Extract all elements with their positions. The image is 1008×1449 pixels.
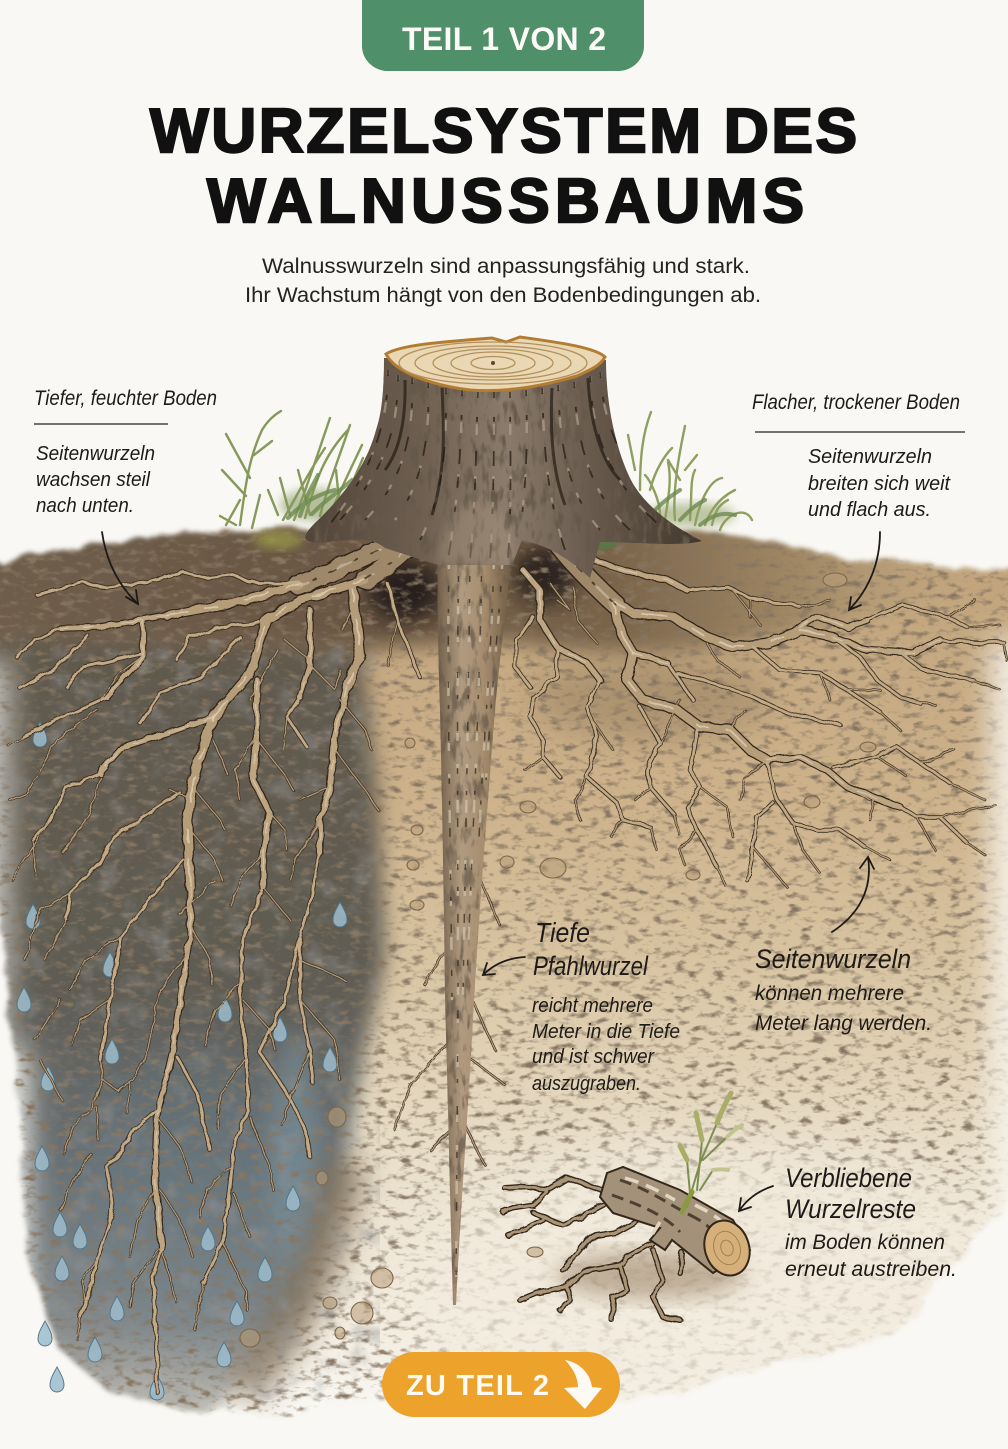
dark gaps beneath stump (367, 558, 443, 622)
soil speckle texture (0, 525, 1008, 1425)
annotation: taproot: Pfahlwurzel (533, 951, 649, 981)
next part button (382, 1352, 620, 1417)
annotation: taproot: auszugraben. (532, 1073, 641, 1095)
title (150, 97, 857, 236)
subtitle: Ihr Wachstum hängt von den Bodenbedingungen ab. (245, 284, 761, 307)
annotation: taproot: reicht mehrere (532, 995, 653, 1017)
annotation: flat dry soil: breiten sich weit (808, 473, 951, 495)
top tab (362, 0, 644, 71)
annotation: deep moist soil: Tiefer, feuchter Boden (34, 387, 217, 410)
small roots (503, 1178, 682, 1320)
moss on soil (254, 531, 302, 549)
lateral roots (8, 500, 1006, 1392)
top tab: TEIL 1 VON 2 (402, 21, 606, 57)
arrow: to right roots (849, 532, 880, 610)
annotation: deep moist soil: nach unten. (36, 495, 134, 517)
stump (290, 337, 720, 580)
arrow: to left roots (102, 532, 138, 604)
log end grain (697, 1215, 757, 1281)
annotation: flat dry soil: und flach aus. (808, 499, 931, 521)
annotation: deep moist soil (34, 387, 217, 517)
sprout (680, 1093, 742, 1212)
taproot collar (438, 500, 514, 565)
annotation: taproot (532, 917, 680, 1095)
topsoil band (0, 520, 1008, 652)
icon: water drops (17, 722, 347, 1400)
taproot (438, 565, 510, 1305)
icon: grass right of stump (591, 412, 752, 549)
annotation: taproot: Tiefe (535, 917, 590, 948)
small plant at stump base (591, 533, 617, 549)
subtitle: Walnusswurzeln sind anpassungsfähig und stark. (262, 255, 750, 278)
remaining root piece with sprout (503, 1093, 757, 1320)
annotation: deep moist soil: wachsen steil (36, 469, 151, 491)
annotation: lateral roots: Meter lang werden. (755, 1012, 932, 1035)
annotation: flat dry soil (752, 391, 965, 521)
annotation: remaining roots (785, 1163, 957, 1281)
blue water wash (108, 1058, 262, 1342)
annotation: remaining roots: Verbliebene (785, 1163, 912, 1193)
annotation: lateral roots: können mehrere (755, 982, 904, 1005)
annotation: deep moist soil: Seitenwurzeln (36, 443, 155, 465)
soil cross-section (0, 500, 1008, 1449)
annotation: flat dry soil: Seitenwurzeln (808, 446, 932, 468)
left faded edge (0, 660, 10, 1449)
annotation: taproot: und ist schwer (532, 1046, 655, 1068)
annotation: taproot: Meter in die Tiefe (532, 1021, 680, 1043)
subtitle (245, 255, 761, 307)
annotation: remaining roots: im Boden können (785, 1231, 945, 1254)
cut surface rings (386, 337, 605, 391)
annotation: flat dry soil: Flacher, trockener Boden (752, 391, 960, 414)
title: WURZELSYSTEM DES (150, 97, 857, 166)
wet dark soil, left (0, 620, 385, 1430)
annotation: lateral roots (755, 944, 932, 1035)
arrow: to taproot (483, 957, 525, 975)
arrow: to root piece (739, 1186, 773, 1211)
annotation: lateral roots: Seitenwurzeln (755, 944, 911, 974)
next part button: ZU TEIL 2 (406, 1370, 549, 1402)
icon: down arrow (564, 1360, 602, 1409)
log body (600, 1167, 750, 1273)
brown transition band (240, 1160, 345, 1390)
pale wash over lower right (400, 1150, 1008, 1449)
annotation: remaining roots: erneut austreiben. (785, 1258, 957, 1281)
title: WALNUSSBAUMS (207, 167, 804, 236)
arrow: to lateral root tips (832, 857, 874, 932)
annotation: remaining roots: Wurzelreste (785, 1194, 916, 1224)
icon: grass left of stump (220, 411, 369, 549)
right faded edge (990, 640, 1008, 1260)
stones in dry soil (240, 573, 876, 1347)
